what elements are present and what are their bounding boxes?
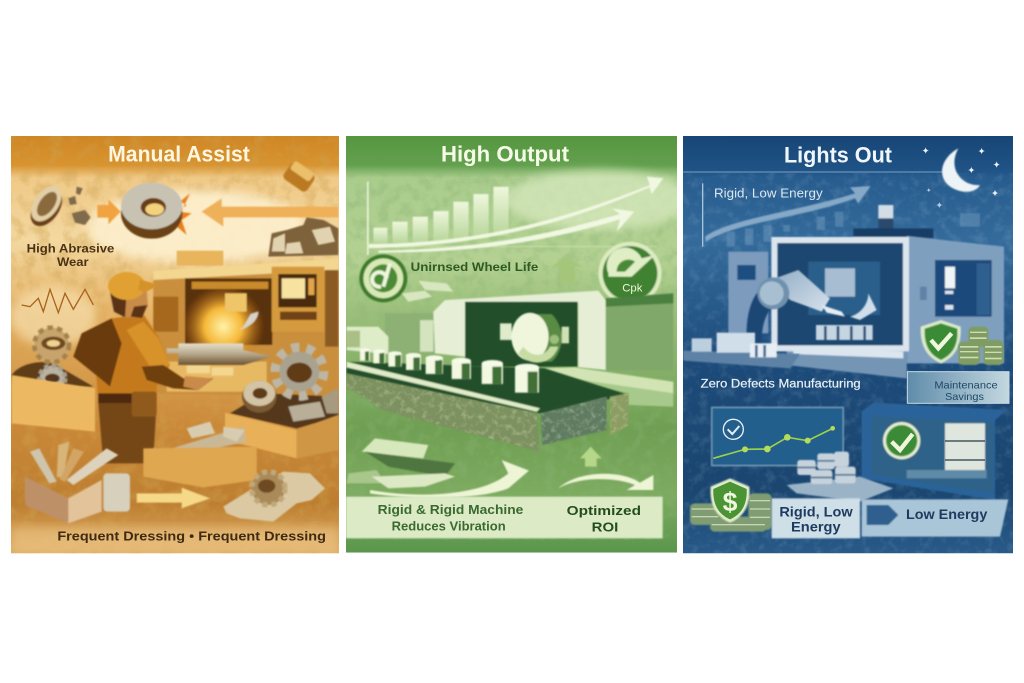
icon: grinding wheel xyxy=(121,183,192,239)
label: high abrasive wear: High Abrasive xyxy=(27,241,114,255)
icon: stars: ✦ xyxy=(935,201,943,211)
skyline xyxy=(727,212,980,247)
label: high abrasive wear xyxy=(28,244,114,266)
stone texture xyxy=(347,372,630,453)
arrow: up xyxy=(554,256,581,284)
icon: grinding wheel xyxy=(500,313,569,363)
label: optimized ROI: ROI xyxy=(592,519,618,534)
icon: stars: ✦ xyxy=(993,160,1001,170)
label: rigid low energy xyxy=(779,504,853,535)
arrow: rising trend xyxy=(705,186,871,242)
panel: High Output xyxy=(346,136,692,553)
icon: dollar coins xyxy=(690,493,772,532)
title: Manual Assist xyxy=(108,142,250,167)
icon: rubble pile xyxy=(268,217,338,257)
icon: dollar shield: $ xyxy=(723,487,738,517)
icon: small worn wheel xyxy=(30,186,63,227)
label: maintenance savings xyxy=(934,380,998,403)
icon: steel coin stacks xyxy=(787,452,893,502)
icon: scrap gear xyxy=(223,472,325,522)
box: centre bin with wrenches xyxy=(143,422,257,487)
box: left bin xyxy=(12,375,95,432)
bar chart xyxy=(367,182,657,255)
conveyor bed xyxy=(347,362,628,452)
icon: small banknotes xyxy=(402,281,453,302)
icon: spindle shaft xyxy=(167,343,272,365)
title: High Output xyxy=(441,142,570,167)
icon: vibration waveform xyxy=(22,289,93,313)
panel: Manual Assist xyxy=(10,136,339,553)
icon: abrasive debris xyxy=(68,187,91,225)
chart: quality trend xyxy=(712,407,843,466)
label: maintenance savings: Savings xyxy=(945,392,984,403)
icon: green shield check xyxy=(921,320,961,363)
arrow: into wheel xyxy=(97,199,121,224)
arrow: savings swoosh xyxy=(370,460,529,498)
label: optimized ROI xyxy=(567,503,641,534)
machine: enclosed cell xyxy=(728,205,1004,378)
workpieces in cell xyxy=(816,325,873,340)
icon: stars: ✦ xyxy=(967,165,975,175)
label: rigid machine: Rigid & Rigid Machine xyxy=(378,502,523,517)
box: low energy banner xyxy=(862,499,1008,537)
arrows: rising output xyxy=(368,177,663,253)
icon: wheel life badge xyxy=(359,254,407,302)
icon: monitor with check xyxy=(862,403,1007,500)
label: rigid machine xyxy=(378,502,523,534)
label: zero defects: Zero Defects Manufacturing xyxy=(701,376,861,390)
icon: broken ring xyxy=(282,161,316,192)
label: rigid machine: Reduces Vibration xyxy=(392,519,506,534)
icon: coin stacks xyxy=(958,327,1003,365)
machine: grinding station xyxy=(153,251,338,397)
machine: grinder enclosure xyxy=(347,291,673,370)
icon: gears left xyxy=(12,328,93,391)
label: rigid low energy top: Rigid, Low Energy xyxy=(714,187,823,201)
label: low energy: Low Energy xyxy=(906,506,988,522)
icon: stars: ✦ xyxy=(922,146,930,156)
icon: dollar shield xyxy=(710,478,750,523)
label: cpk: Cpk xyxy=(622,283,643,295)
icon: banknotes xyxy=(347,438,455,488)
label: frequent dressing: Frequent Dressing • Frequent Dressing xyxy=(57,530,326,544)
rails: conveyor exit xyxy=(545,367,673,407)
icon: stars xyxy=(922,146,1001,211)
label: optimized ROI: Optimized xyxy=(567,503,641,518)
arrow: to scrap xyxy=(137,488,210,508)
box: rigid low energy xyxy=(772,498,860,538)
icon: stars: ✦ xyxy=(926,187,932,195)
workpieces on conveyor xyxy=(360,348,539,393)
panel: Lights Out xyxy=(683,136,1013,553)
label: maintenance savings: Maintenance xyxy=(934,380,998,391)
arrow: small up xyxy=(580,447,602,467)
worker xyxy=(73,272,213,463)
icon: cpk gauge badge xyxy=(598,242,662,305)
box: tools xyxy=(25,442,130,523)
title: Lights Out xyxy=(784,142,893,167)
label: rigid low energy: Rigid, Low xyxy=(779,504,853,520)
robot arm xyxy=(746,270,877,343)
box: right bin with parts xyxy=(225,348,338,458)
infographic: three automation levels xyxy=(11,136,1013,554)
box: maintenance savings xyxy=(907,372,1009,403)
label: wheel life: Unirnsed Wheel Life xyxy=(411,260,539,274)
icon: moon xyxy=(942,148,980,192)
arrow: wear force xyxy=(202,198,338,227)
label: high abrasive wear: Wear xyxy=(57,255,89,269)
table with billets xyxy=(683,333,800,368)
arrow: ROI swoosh xyxy=(558,474,653,490)
icon: stars: ✦ xyxy=(978,147,986,157)
text band xyxy=(346,497,663,538)
label: rigid low energy: Energy xyxy=(791,519,841,535)
icon: stars: ✦ xyxy=(991,189,999,199)
